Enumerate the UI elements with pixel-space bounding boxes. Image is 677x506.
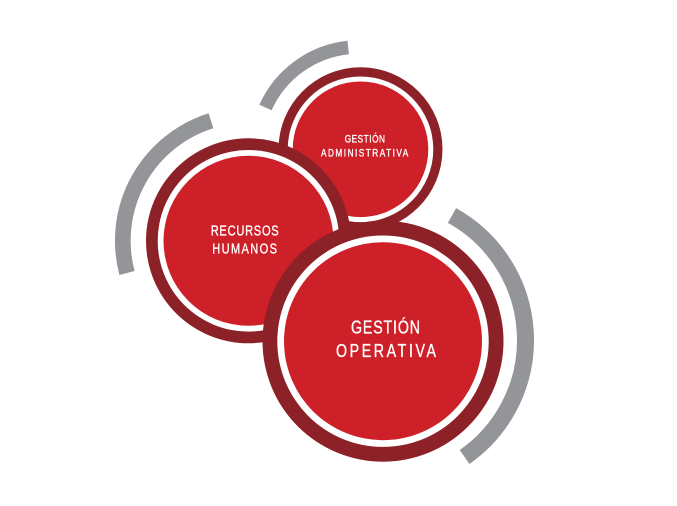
label: gestión administrativa: ADMINISTRATIVA: [321, 148, 409, 160]
label: gestión administrativa: GESTIÓN: [345, 133, 385, 146]
label: gestión operativa: [336, 317, 436, 361]
label: recursos humanos: [211, 222, 279, 257]
circle: gestión operativa: [262, 221, 504, 462]
label: recursos humanos: RECURSOS: [211, 222, 279, 239]
arc: gestión administrativa: [266, 48, 348, 108]
circle: gestión administrativa: [278, 67, 442, 231]
circle: recursos humanos: [146, 138, 351, 343]
label: recursos humanos: HUMANOS: [212, 240, 277, 257]
arc: gestión operativa: [452, 216, 525, 457]
label: gestión administrativa: [321, 133, 409, 160]
arc: recursos humanos: [123, 121, 211, 273]
label: gestión operativa: OPERATIVA: [336, 341, 436, 361]
label: gestión operativa: GESTIÓN: [351, 317, 420, 338]
